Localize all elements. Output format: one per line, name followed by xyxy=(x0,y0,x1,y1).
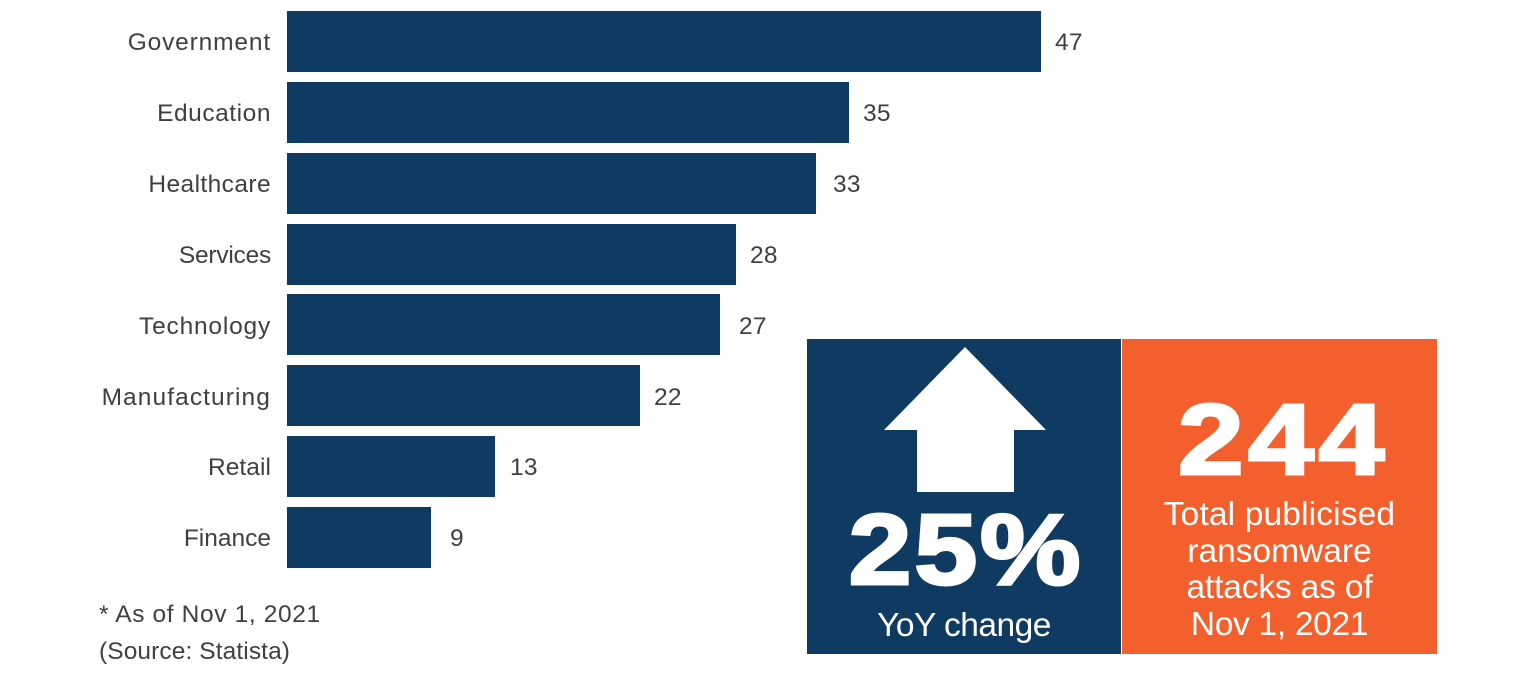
description: total publicised attacks xyxy=(1164,496,1395,642)
row: Technology: 27 xyxy=(739,313,767,340)
description: total publicised attacks: Nov 1, 2021 xyxy=(1191,606,1368,642)
row: Education: Education xyxy=(157,100,271,127)
row: Services: 28 xyxy=(750,242,778,269)
description: total publicised attacks: attacks as of xyxy=(1186,569,1373,606)
row: Retail: 13 xyxy=(510,454,538,481)
row: Finance xyxy=(184,507,464,568)
big number: 25%: 25% xyxy=(848,494,1083,606)
description: total publicised attacks: Total publicised xyxy=(1164,496,1395,533)
row: Technology xyxy=(139,294,767,355)
row: Technology: Technology xyxy=(139,313,271,340)
description: total publicised attacks: ransomware xyxy=(1187,532,1372,570)
footnote and source: (Source: Statista) xyxy=(99,638,290,665)
row: Manufacturing: 22 xyxy=(654,384,682,411)
row: Finance: 9 xyxy=(450,525,464,552)
row: Education xyxy=(157,82,891,143)
row: Healthcare xyxy=(148,153,861,214)
row: Government xyxy=(128,11,1083,72)
panel: YoY change xyxy=(807,339,1121,654)
row: Manufacturing xyxy=(102,365,682,426)
footnote and source: * As of Nov 1, 2021 xyxy=(99,601,321,628)
label: YoY change: YoY change xyxy=(877,607,1051,644)
row: Healthcare: Healthcare xyxy=(148,171,271,198)
panel: total attacks xyxy=(1122,339,1437,654)
row: Services xyxy=(179,224,778,285)
icon: up arrow xyxy=(884,347,1046,492)
row: Retail: Retail xyxy=(208,454,271,481)
bar chart: ransomware attacks by sector xyxy=(102,11,1083,568)
row: Healthcare: 33 xyxy=(833,171,861,198)
row: Education: 35 xyxy=(863,100,891,127)
row: Finance: Finance xyxy=(184,525,271,552)
row: Government: 47 xyxy=(1055,29,1083,56)
row: Manufacturing: Manufacturing xyxy=(102,384,271,411)
row: Retail xyxy=(208,436,538,497)
footnote and source xyxy=(99,601,321,665)
big number: 244: 244 xyxy=(1178,384,1389,496)
row: Government: Government xyxy=(128,29,271,56)
row: Services: Services xyxy=(179,242,271,269)
